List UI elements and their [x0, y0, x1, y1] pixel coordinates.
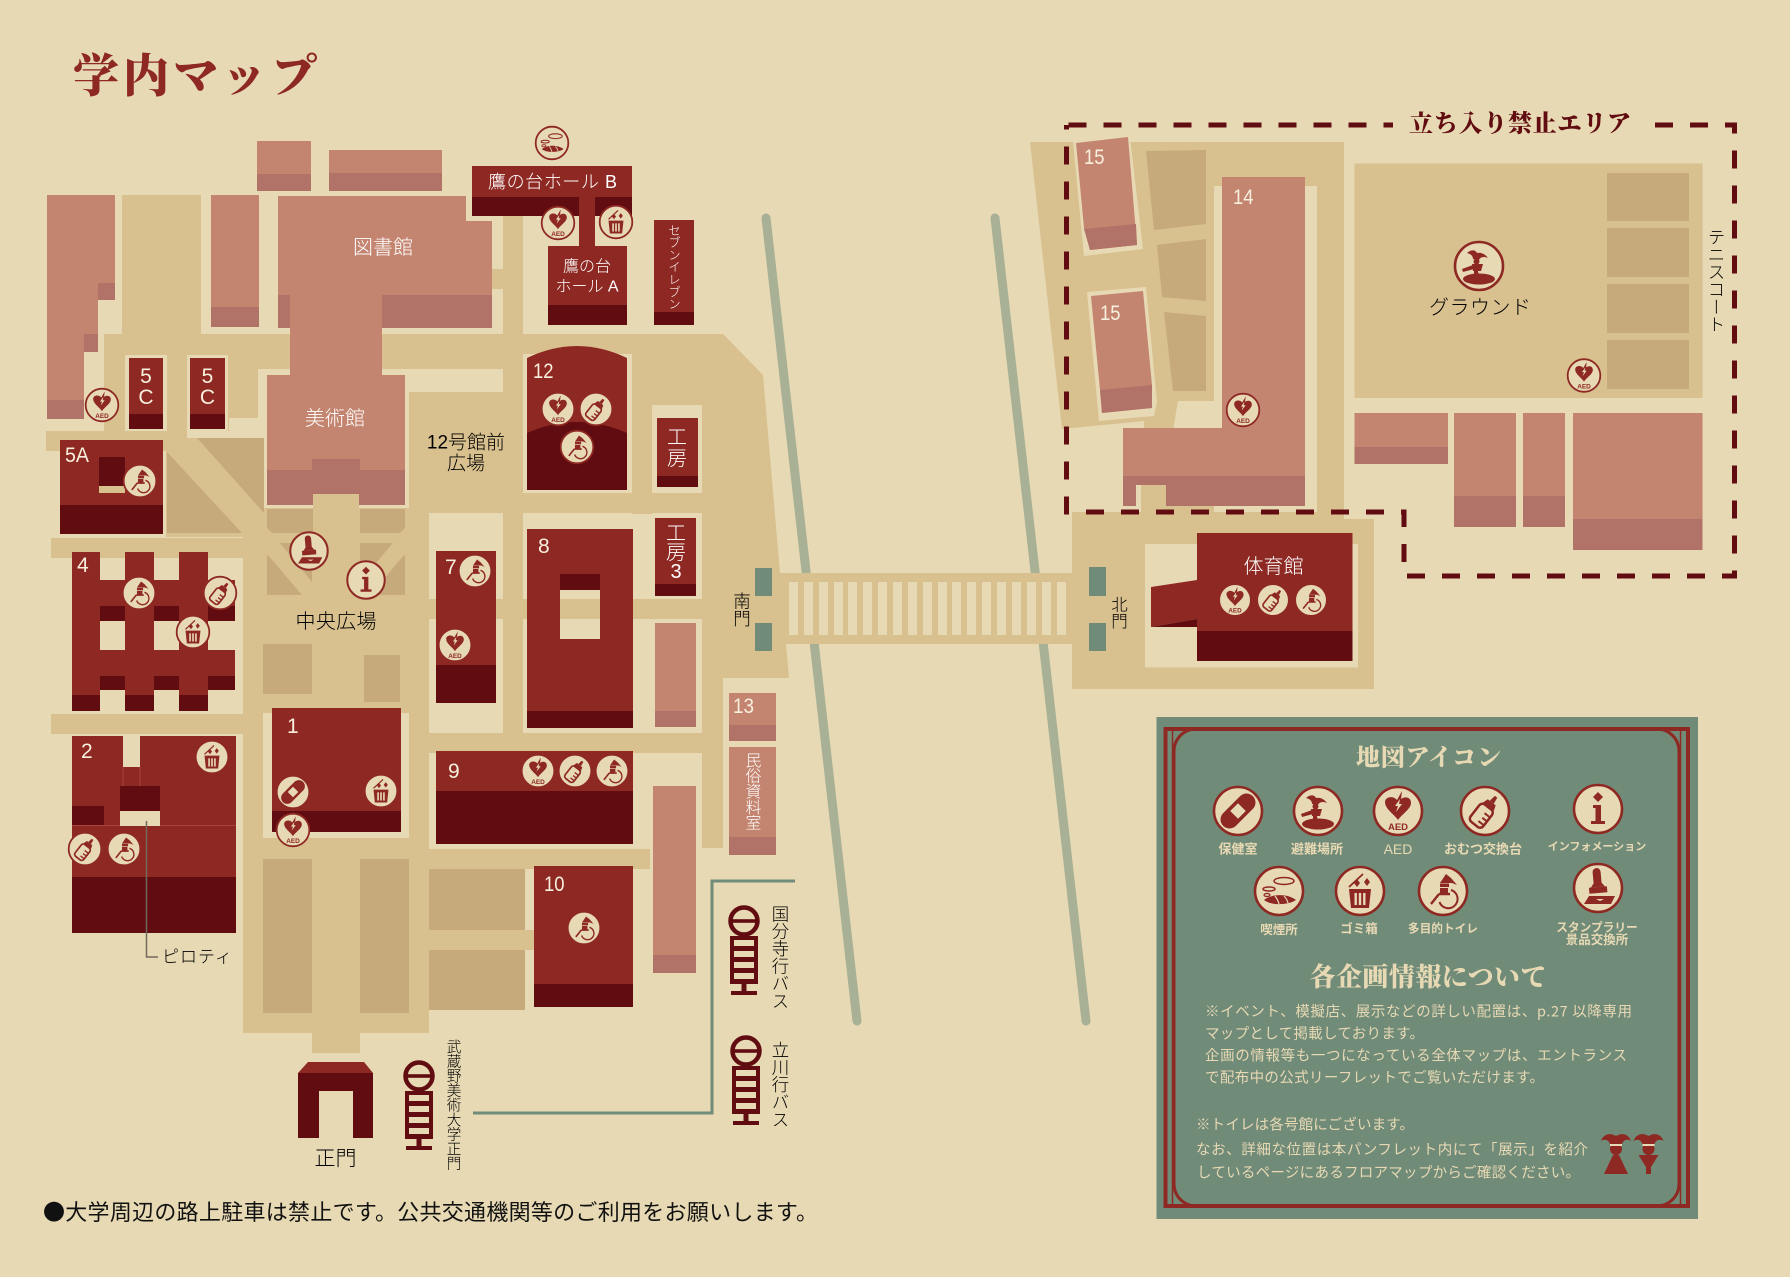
- building: library: 図書館: [353, 236, 413, 259]
- building: Takanodai Hall B and A: 鷹の台ホール B: [488, 172, 617, 192]
- label: central plaza: 中央広場: [296, 610, 376, 633]
- building: 13: 13: [733, 695, 754, 718]
- main gate: [298, 1062, 373, 1170]
- building: 2: [72, 736, 236, 933]
- building: Takanodai Hall B and A: [472, 166, 632, 325]
- bus stop: Musashino Art University main gate: 武蔵野美術大学正門: [444, 1039, 461, 1171]
- building: 5C left: C: [138, 386, 154, 409]
- icon: AED, 9: [522, 755, 554, 787]
- text block: exhibits note: マップとして掲載しております。: [1205, 1022, 1424, 1044]
- legend item: evacuation site: [1291, 787, 1343, 856]
- icon: trash, 1: [365, 775, 397, 807]
- map icons: [69, 127, 1600, 944]
- building: 4: 4: [77, 554, 89, 577]
- text block: exhibits note: で配布中の公式リーフレットでご覧いただけます。: [1205, 1066, 1544, 1088]
- title: 学内マップ: [73, 51, 317, 102]
- icon: AED, 7: AED: [448, 653, 462, 660]
- icon: AED, 7: [439, 629, 471, 661]
- gates: south gate posts: [755, 568, 772, 651]
- icon: AED, 1: AED: [286, 838, 300, 845]
- building: 10: [534, 866, 633, 1007]
- icon: AED, 9: AED: [531, 779, 545, 786]
- roads: south campus: [46, 195, 789, 1053]
- building: 8: 8: [538, 535, 550, 558]
- icon: evacuation, ground: [1455, 242, 1503, 290]
- building: 1: 1: [287, 715, 299, 738]
- text block: toilet note: なお、詳細な位置は本パンフレット内にて「展示」を紹介: [1196, 1138, 1588, 1160]
- building: 1: [272, 708, 401, 832]
- icon: AED, 12: [542, 393, 574, 425]
- bus route line: [473, 881, 795, 1113]
- main gate: 正門: [314, 1148, 356, 1170]
- bus stop: to Kokubunji: 国分寺行バス: [770, 905, 790, 1009]
- icon: AED, 14: AED: [1236, 418, 1250, 425]
- building: workshop: 工: [667, 427, 687, 449]
- icon: information: [347, 561, 385, 599]
- building: 5C right: [190, 358, 225, 429]
- planting patches: north campus: [1146, 150, 1206, 391]
- building: 12: [527, 346, 627, 490]
- building: workshop: [657, 418, 698, 487]
- roads: north campus: [1030, 142, 1374, 689]
- legend item: stamp rally: スタンプラリー: [1556, 922, 1638, 934]
- icon: trash, Hall: [600, 206, 632, 238]
- building: 2: 2: [81, 740, 93, 763]
- building: art museum: [267, 375, 405, 533]
- building: 14: 14: [1233, 186, 1254, 209]
- icon: diaper, 12: [580, 393, 612, 425]
- legend item: trash: [1336, 867, 1384, 936]
- text block: toilet note: しているページにあるフロアマップからご確認ください。: [1197, 1162, 1580, 1182]
- icon: diaper, gym: [1257, 584, 1289, 616]
- bus stop: Musashino Art University main gate: [405, 1039, 461, 1171]
- bus stop: to Tachikawa: [732, 1038, 790, 1128]
- legend item: health room: 保健室: [1218, 842, 1258, 856]
- building: gymnasium: [1145, 533, 1358, 668]
- legend item: diaper changing: [1444, 787, 1522, 856]
- callout: piloti: ピロティ: [162, 948, 232, 966]
- building: workshop 3: 工: [666, 523, 686, 545]
- icon: diaper, 2: [69, 833, 101, 865]
- legend item: diaper changing: おむつ交換台: [1444, 842, 1522, 856]
- legend item: AED: [1374, 787, 1422, 857]
- building: 5C left: 5: [140, 365, 152, 388]
- building: 14: [1123, 177, 1305, 506]
- plaza planting patches: [167, 438, 525, 1013]
- building: gymnasium: 体育館: [1244, 555, 1304, 578]
- legend item: stamp rally: [1556, 864, 1638, 947]
- legend item: stamp rally: 景品交換所: [1566, 932, 1629, 947]
- building: workshop 3: 房: [666, 542, 686, 564]
- text block: exhibits note: ※イベント、模擬店、展示などの詳しい配置は、p.27 以降専用: [1205, 1000, 1632, 1022]
- heading: map icons: 地図アイコン: [1356, 744, 1501, 772]
- building: 5C left: [129, 358, 163, 429]
- icon: smoking, Hall B: [536, 127, 568, 159]
- bridge: [780, 573, 1075, 644]
- icon: jester toilet figures: [1601, 1134, 1664, 1174]
- building: 15 upper: 15: [1084, 146, 1104, 169]
- building: 13: [729, 693, 776, 741]
- text block: toilet note: ※トイレは各号館にございます。: [1196, 1114, 1414, 1134]
- icon: diaper, 9: [559, 755, 591, 787]
- legend item: evacuation site: 避難場所: [1291, 842, 1343, 856]
- building: 12: 12: [533, 360, 554, 383]
- icon: AED, west: AED: [95, 413, 109, 420]
- building: 10: 10: [544, 873, 564, 896]
- icon: health room, 1: [277, 776, 309, 808]
- icon: AED, 12: AED: [551, 417, 565, 424]
- label: plaza 12: 12号館前: [427, 432, 505, 454]
- building halos: [125, 355, 409, 838]
- rivers: [766, 218, 1086, 1021]
- icon: accessible toilet, 9: [596, 755, 628, 787]
- road stub south of 14: [1141, 485, 1162, 512]
- building: 15 lower: [1087, 287, 1157, 421]
- icon: diaper, 4: [204, 577, 236, 609]
- legend item: information: [1548, 785, 1646, 853]
- icon: accessible toilet, 4: [123, 577, 155, 609]
- legend item: health room: [1214, 787, 1262, 856]
- building: workshop 3: 3: [670, 561, 682, 583]
- building: 9: 9: [448, 760, 460, 783]
- icon: accessible toilet, 2: [108, 833, 140, 865]
- ground and tennis courts: [1354, 164, 1702, 398]
- legend item: AED: AED: [1384, 841, 1412, 857]
- building: workshop 3: [655, 518, 696, 596]
- bus stop: to Kokubunji: [730, 905, 790, 1009]
- building: Takanodai Hall B and A: 鷹の台: [563, 258, 611, 276]
- legend item: AED: AED: [1388, 822, 1408, 833]
- icon: AED, 14: [1227, 394, 1259, 426]
- buildings: upper west (light): [47, 141, 442, 419]
- building: workshop: 房: [667, 448, 687, 470]
- icon: AED, Hall: AED: [551, 231, 565, 238]
- legend item: smoking: 喫煙所: [1260, 923, 1298, 937]
- restricted area boundary: [1066, 110, 1734, 576]
- building: 5C right: C: [200, 386, 215, 409]
- building: art museum: 美術館: [305, 407, 365, 430]
- building: unnamed east of 8: [655, 623, 696, 727]
- callout: piloti: [146, 821, 232, 966]
- text block: exhibits note: 企画の情報等も一つになっている全体マップは、エントランス: [1205, 1044, 1627, 1066]
- icon: accessible toilet, 12: [561, 431, 593, 463]
- building: 5C right: 5: [202, 365, 213, 388]
- icon: AED, Hall: [542, 207, 574, 239]
- legend item: accessible toilet: 多目的トイレ: [1408, 922, 1478, 936]
- icon: AED, ground: [1568, 359, 1600, 392]
- label: tennis court: テニスコート: [1706, 228, 1726, 333]
- icon: AED, 1: [277, 814, 309, 846]
- text block: exhibits note: [1205, 1000, 1632, 1088]
- icon: AED, gym: [1219, 584, 1251, 616]
- legend item: trash: ゴミ箱: [1340, 921, 1378, 936]
- panel: legend: [1156, 717, 1698, 1219]
- icon: stamp rally: [290, 532, 328, 570]
- buildings: north-east blocks: [1354, 413, 1702, 550]
- building: Seven-Eleven: セブンイレブン: [666, 224, 681, 310]
- label: plaza 12: 広場: [447, 452, 485, 474]
- icon: accessible toilet, gym: [1295, 584, 1327, 616]
- icon: accessible toilet, 7: [459, 555, 491, 587]
- icon: accessible toilet, 5A: [124, 465, 156, 497]
- legend item: smoking: [1255, 867, 1303, 937]
- building: Takanodai Hall B and A: ホール A: [555, 278, 619, 296]
- building: library: [278, 196, 492, 375]
- gates: north gate posts: [1089, 567, 1106, 651]
- bus stop: to Tachikawa: 立川行バス: [770, 1041, 790, 1128]
- heading: about exhibits: 各企画情報について: [1310, 962, 1546, 992]
- heading: restricted area: 立ち入り禁止エリア: [1409, 110, 1631, 138]
- building: 7: 7: [445, 556, 457, 579]
- icon: trash, 2: [196, 741, 228, 773]
- icon: AED, gym: AED: [1228, 608, 1242, 615]
- text block: toilet note: [1196, 1114, 1588, 1182]
- light surround of building 14: [1173, 186, 1317, 512]
- building: long east block: [653, 786, 696, 973]
- label: south gate: 南門: [732, 592, 752, 627]
- building: 7: [436, 551, 496, 703]
- building: folk archive: [729, 747, 776, 855]
- icon: AED, ground: AED: [1577, 383, 1591, 390]
- building: Seven-Eleven: [654, 220, 694, 325]
- legend item: information: インフォメーション: [1548, 840, 1646, 853]
- building: 15 lower: 15: [1100, 302, 1120, 325]
- building: 9: [436, 751, 633, 844]
- icon: accessible toilet, 10: [568, 912, 600, 944]
- building: 4: [72, 552, 235, 711]
- building: 5A: 5A: [65, 444, 89, 467]
- icon: AED, west: [86, 389, 118, 421]
- label: north gate: 北門: [1108, 596, 1128, 629]
- building: 8: [527, 529, 633, 728]
- label: plaza 12: [427, 432, 505, 474]
- building: 5A: [60, 440, 163, 534]
- legend item: accessible toilet: [1408, 867, 1478, 936]
- building: folk archive: 民俗資料室: [743, 752, 761, 830]
- building: 15 upper: [1073, 137, 1143, 256]
- icon: trash, 4: [177, 616, 209, 648]
- ground and tennis courts: グラウンド: [1429, 296, 1531, 319]
- footer note: ●大学周辺の路上駐車は禁止です。公共交通機関等のご利用をお願いします。: [43, 1195, 818, 1227]
